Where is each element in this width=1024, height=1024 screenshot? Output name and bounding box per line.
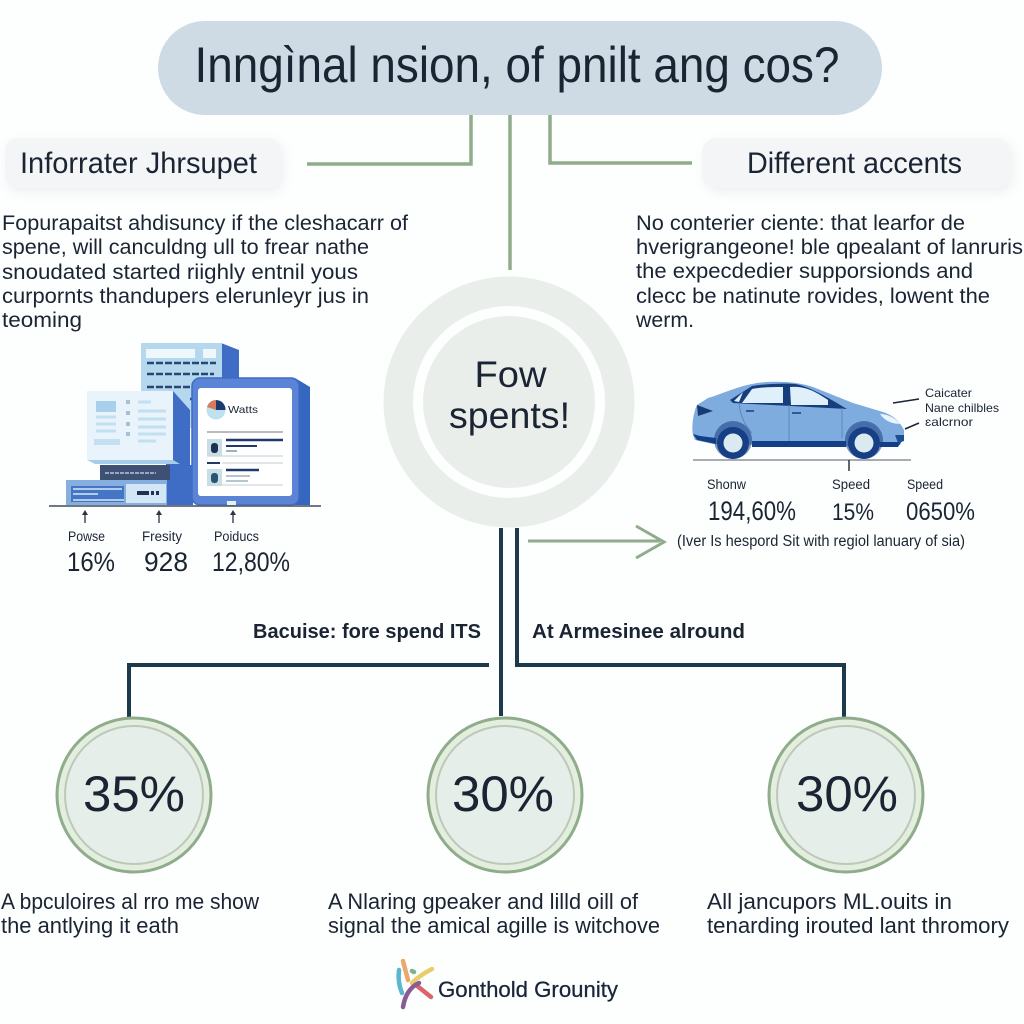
center circle: spents! — [449, 395, 570, 436]
right text block: clecc be natinute rovides, lowent the — [636, 284, 990, 308]
right text block: hverigrangeone! ble qpealant of lanruris — [636, 235, 1023, 259]
windows — [730, 384, 847, 409]
right stats: 194,60% — [708, 496, 796, 526]
pie chart — [206, 400, 226, 420]
caption right: All jancupors ML.ouits in — [707, 889, 952, 914]
stat circle 30% center — [428, 718, 582, 872]
left stats: 16% — [67, 547, 115, 577]
logo — [399, 961, 618, 1007]
building — [141, 343, 239, 428]
stand — [100, 465, 194, 480]
caption left: A bpculoires al rro me show — [1, 889, 259, 914]
caption center — [328, 889, 660, 938]
left stats: 928 — [144, 547, 188, 577]
left text block — [2, 211, 408, 332]
stat circle 30% right: 30% — [796, 766, 898, 822]
left stats: Poiducs — [214, 529, 259, 544]
logo: Gonthold Grounity — [438, 977, 618, 1002]
title banner: Inngìnal nsion, of pnilt ang cos? — [194, 37, 840, 93]
right stats: Speed — [907, 476, 943, 492]
right text block — [635, 211, 1023, 332]
left stats — [67, 510, 290, 577]
left stats: Fresity — [142, 529, 182, 544]
arrow caption: (Iver Is hespord Sit with regiol lanuary of sia) — [677, 533, 965, 550]
right text block: No conterier ciente: that learfor de — [636, 211, 965, 235]
rocker and bumper — [693, 434, 901, 447]
car body — [692, 382, 904, 447]
caption left — [1, 889, 259, 938]
right stats — [707, 476, 975, 526]
illustration: car: Caicater — [925, 386, 972, 400]
stat circle 35%: 35% — [83, 766, 185, 822]
right stats: Shonw — [707, 476, 747, 492]
monitor — [87, 391, 190, 505]
stat circle 30% center: 30% — [452, 766, 554, 822]
left heading — [5, 138, 280, 188]
left text block: teoming — [2, 308, 82, 332]
left branch label: Bacuise: fore spend ITS — [253, 621, 481, 643]
right stats: 0650% — [906, 498, 975, 526]
caption right: tenarding irouted lant thromory — [707, 913, 1009, 938]
connector lines — [129, 115, 844, 717]
stat circle 35% — [57, 718, 211, 872]
right stats: Speed — [832, 476, 870, 492]
left text block: snoudated started riighly entnil yous — [2, 260, 358, 284]
arrow — [528, 526, 664, 558]
caption left: the antlying it eath — [1, 913, 179, 938]
center circle: Fow — [474, 354, 547, 395]
center circle — [384, 276, 634, 528]
icon: logo mark — [399, 961, 432, 1007]
left text block: Fopurapaitst ahdisuncy if the cleshacarr of — [2, 211, 408, 235]
left stats: Powse — [68, 529, 105, 544]
tablet — [192, 378, 310, 505]
right text block: the expecdedier supporsionds and — [636, 259, 973, 283]
caption center: signal the amical agille is witchove — [328, 913, 660, 938]
right heading — [702, 138, 1010, 188]
right text block: werm. — [635, 308, 694, 332]
tablet: Watts — [228, 404, 258, 416]
left text block: curpornts thandupers elerunleyr jus in — [2, 284, 369, 308]
right heading: Different accents — [747, 147, 962, 180]
right branch label: At Armesinee alround — [532, 621, 745, 643]
title banner — [158, 21, 882, 115]
illustration: office devices — [49, 343, 321, 506]
caption right — [707, 889, 1009, 938]
illustration: car: Nane chilbles — [925, 401, 999, 415]
right stats: 15% — [832, 499, 874, 526]
base unit — [66, 480, 193, 505]
stat circle 30% right — [769, 718, 923, 872]
left stats: 12,80% — [212, 547, 290, 577]
wheels — [714, 421, 883, 459]
left heading: Inforrater Jhrsupet — [20, 147, 258, 180]
caption center: A Nlaring gpeaker and lilld oill of — [328, 889, 639, 914]
illustration: car: ɛalcrnor — [925, 415, 973, 429]
left text block: spene, will canculdng ull to frear nathe — [2, 235, 369, 259]
illustration: car — [692, 382, 999, 471]
